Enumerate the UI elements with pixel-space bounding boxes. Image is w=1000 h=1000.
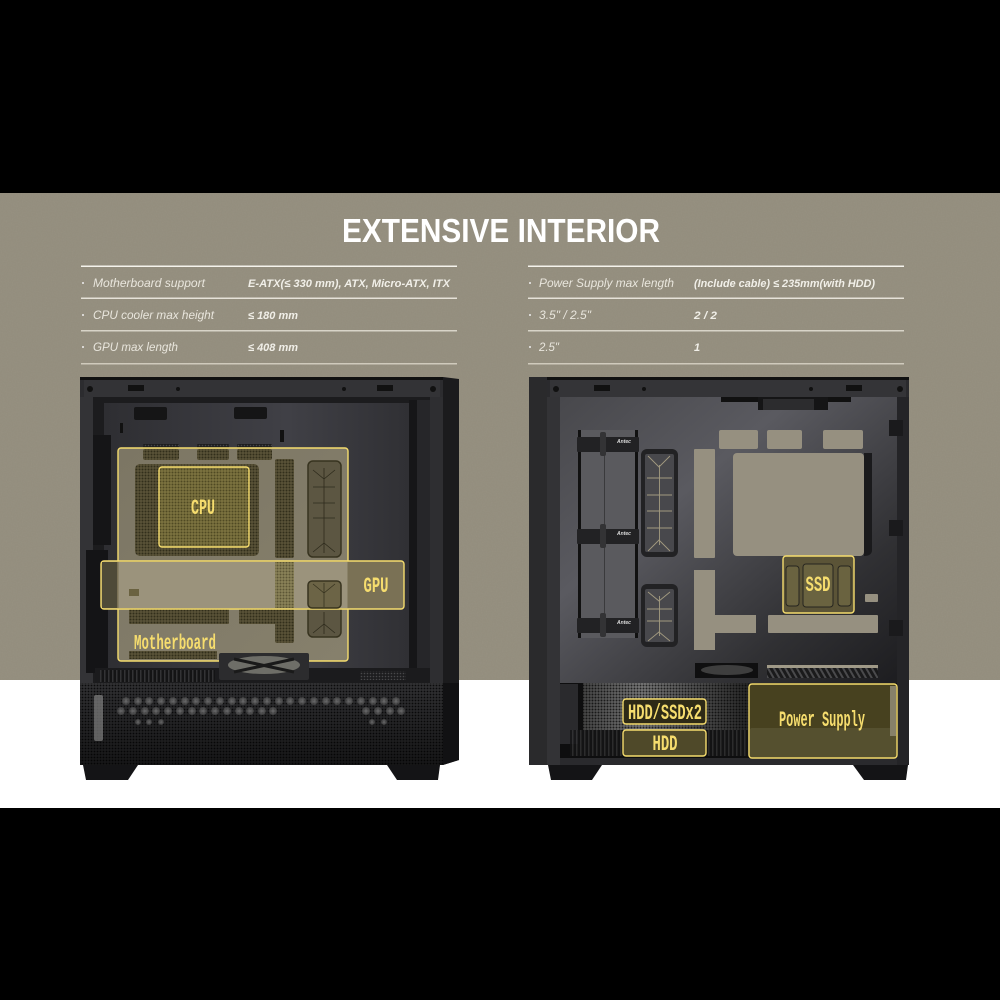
label: HDD/SSDx2: HDD/SSDx2	[628, 701, 702, 726]
label: HDD: HDD	[652, 732, 678, 757]
spec: CPU cooler: CPU cooler max height	[93, 308, 215, 322]
spec: motherboard support: Motherboard support	[93, 276, 206, 290]
SSD zone	[783, 556, 854, 613]
HDD zone	[623, 730, 706, 757]
grommet lines	[313, 468, 335, 634]
HDD/SSD zone	[623, 699, 706, 726]
panel: left case view	[80, 377, 459, 780]
motherboard zone	[118, 448, 348, 661]
spec: GPU length: GPU max length	[93, 340, 178, 354]
label: SSD: SSD	[806, 573, 830, 598]
CPU zone	[159, 467, 249, 547]
spec value: CPU cooler: ≤ 180 mm	[248, 310, 298, 322]
spec value: GPU length: ≤ 408 mm	[248, 342, 298, 354]
bottom floor of case	[95, 668, 430, 683]
spec value: power supply: (Include cable) ≤ 235mm(with HDD)	[694, 278, 875, 290]
label: GPU: GPU	[364, 574, 388, 599]
spec value: motherboard support: E-ATX(≤ 330 mm), ATX, Micro-ATX, ITX	[248, 278, 451, 290]
bottom fan and vent	[695, 663, 878, 678]
case body	[529, 377, 909, 765]
spec: power supply: Power Supply max length	[539, 276, 674, 290]
cutouts showing background	[694, 430, 878, 650]
strap logo: Antec	[616, 620, 631, 626]
spec value: 3.5/2.5: 2 / 2	[693, 310, 717, 322]
rear mesh and floor	[560, 683, 751, 756]
PSU shroud	[80, 683, 459, 765]
GPU zone	[101, 561, 404, 609]
cable grommets	[641, 449, 678, 647]
label: CPU: CPU	[191, 496, 215, 521]
spec: 2.5: 2.5"	[538, 340, 560, 354]
bottom fan	[219, 653, 309, 680]
motherboard grommets	[308, 461, 341, 637]
spec table: right	[528, 266, 904, 364]
spec value: 2.5: 1	[694, 342, 700, 354]
motherboard cutouts	[129, 449, 294, 659]
label: Motherboard: Motherboard	[134, 633, 216, 656]
top cutouts above motherboard	[143, 444, 272, 450]
case body	[80, 377, 459, 765]
spec table: left	[81, 266, 457, 364]
strap logo: Antec	[616, 531, 631, 537]
panel: right case view	[529, 377, 909, 780]
spec: 3.5/2.5: 3.5" / 2.5"	[539, 308, 592, 322]
Power Supply zone	[749, 684, 897, 758]
cable straps and bracket	[577, 430, 639, 638]
case feet	[548, 765, 908, 780]
title: EXTENSIVE INTERIOR	[342, 212, 660, 249]
strap logo: Antec	[616, 439, 631, 445]
label: Power Supply: Power Supply	[779, 708, 865, 733]
fan behind main cutout	[864, 453, 872, 556]
case feet	[83, 765, 440, 780]
